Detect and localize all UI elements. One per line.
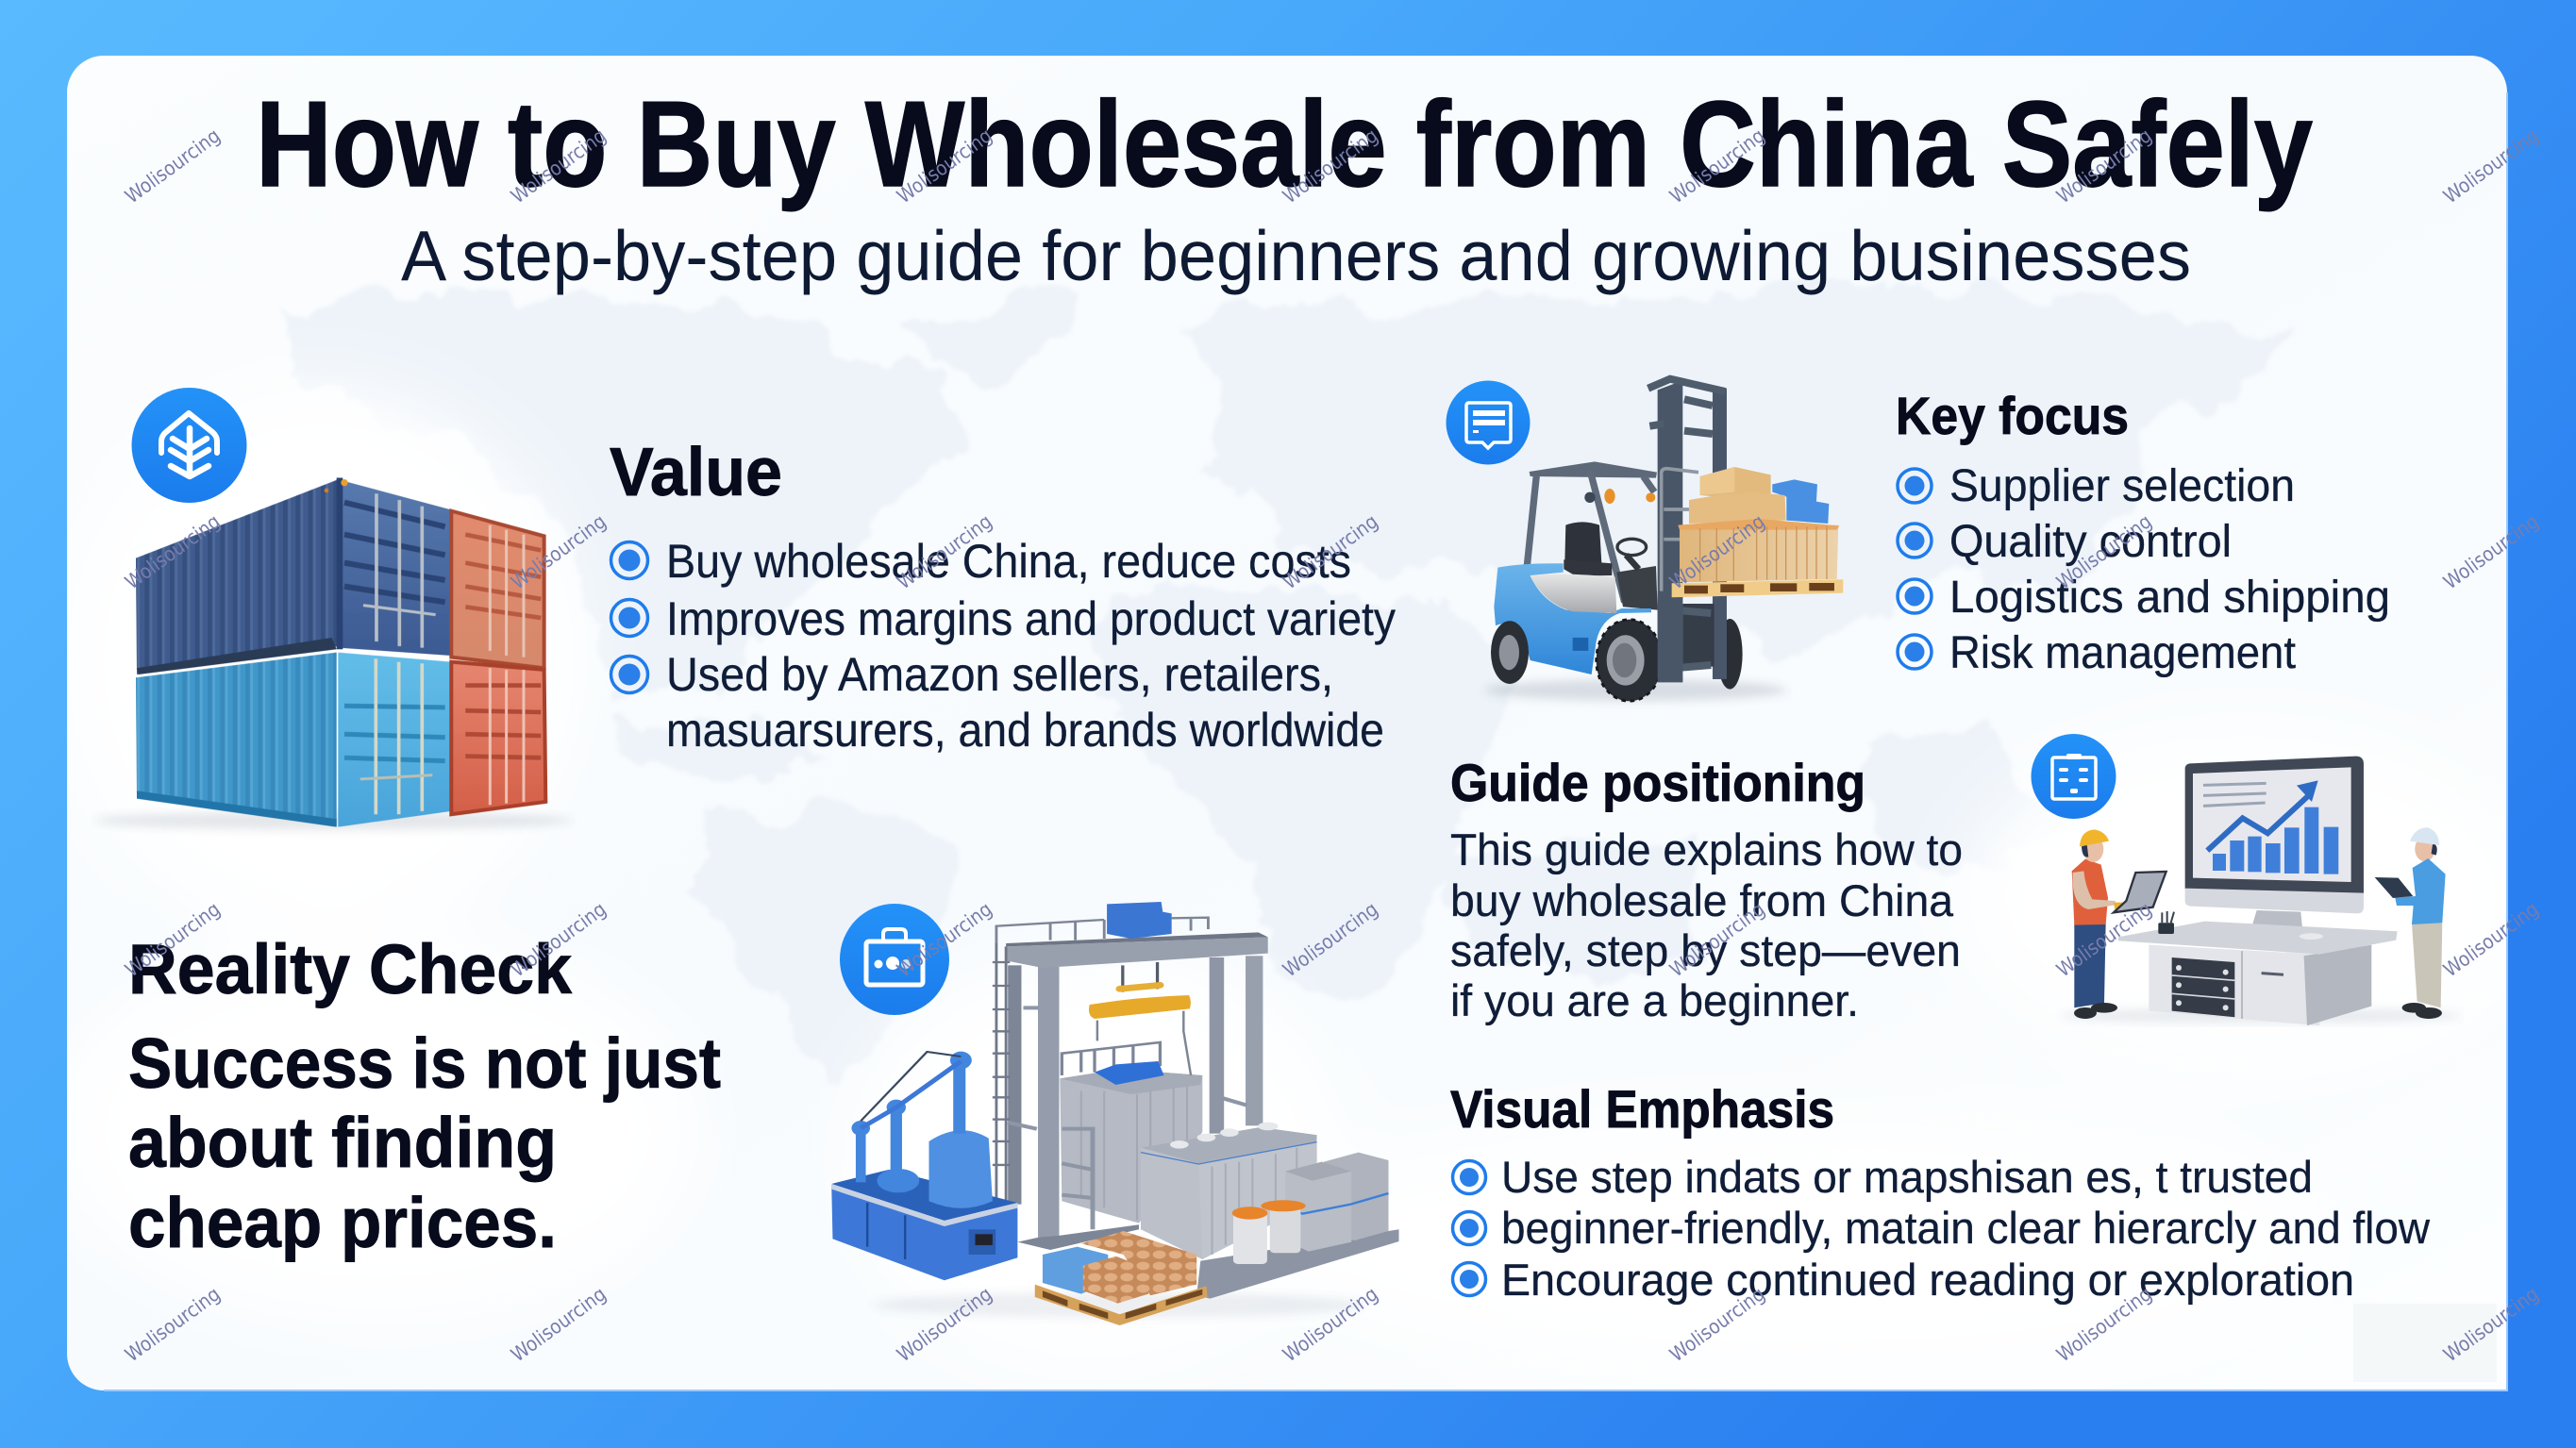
- subtitle: A step-by-step guide for beginners and growing businesses: [401, 216, 2191, 295]
- Wolisourcing watermarks: Wolisourcing: [893, 898, 996, 981]
- icon: briefcase: [840, 904, 949, 1015]
- panel: factory illustration: [831, 902, 1399, 1325]
- Wolisourcing watermarks: Wolisourcing: [1279, 510, 1382, 593]
- Wolisourcing watermarks: Wolisourcing: [121, 898, 225, 981]
- bullet list: value: masuarsurers, and brands worldwide: [666, 704, 1384, 757]
- panel: reality check: [128, 930, 721, 1262]
- statement: [128, 1024, 721, 1262]
- bullet list: value: Buy wholesale China, reduce costs: [666, 535, 1351, 588]
- Wolisourcing watermarks: Wolisourcing: [2439, 1283, 2543, 1366]
- monitor: [2185, 757, 2364, 939]
- heading: value: Value: [610, 435, 782, 510]
- paragraph: buy wholesale from China: [1450, 875, 1954, 925]
- bullet list: value: Improves margins and product variety: [666, 592, 1396, 645]
- heading: visual emphasis: Visual Emphasis: [1450, 1079, 1834, 1139]
- canopy and pillars: [1527, 461, 1657, 602]
- Wolisourcing watermarks: Wolisourcing: [2052, 1283, 2156, 1366]
- paragraph: [1450, 824, 1963, 1025]
- Wolisourcing watermarks: Wolisourcing: [2439, 125, 2543, 208]
- mast: [1648, 379, 1727, 682]
- bullet list: visual emphasis: beginner-friendly, matain clear hierarcly and flow: [1501, 1203, 2431, 1253]
- industrial plant: [831, 902, 1399, 1325]
- bullet list: visual emphasis: [1453, 1152, 2431, 1305]
- lower light blue container: [136, 653, 451, 827]
- paragraph: This guide explains how to: [1450, 824, 1963, 874]
- heading: key focus: Key focus: [1896, 386, 2129, 445]
- Wolisourcing watermarks: Wolisourcing: [121, 510, 225, 593]
- Wolisourcing watermarks: Wolisourcing: [507, 1283, 611, 1366]
- Wolisourcing watermarks: Wolisourcing: [893, 510, 996, 593]
- forklift with crate: [1484, 379, 1843, 701]
- bullet list: visual emphasis: Encourage continued reading or exploration: [1501, 1255, 2354, 1305]
- statement: about finding: [128, 1103, 557, 1182]
- card content backdrop: faint world map and halos: [287, 278, 2291, 1077]
- white halos behind illustrations: [347, 389, 2078, 873]
- stacked cubes: [1285, 1153, 1388, 1252]
- bullet list: key focus: Logistics and shipping: [1949, 573, 2390, 623]
- paragraph: if you are a beginner.: [1450, 975, 1859, 1025]
- bullet list: value: [611, 535, 1396, 757]
- front tank: [1141, 1127, 1317, 1259]
- Wolisourcing watermarks: Wolisourcing: [507, 125, 611, 208]
- statement: cheap prices.: [128, 1183, 557, 1262]
- bullet list: key focus: Risk management: [1949, 628, 2296, 678]
- Wolisourcing watermarks: Wolisourcing: [1279, 1283, 1382, 1366]
- bullet list: visual emphasis: Use step indats or mapshisan es, t trusted: [1501, 1152, 2313, 1202]
- forklift body: [1494, 563, 1651, 674]
- stacked shipping containers: [94, 478, 573, 830]
- bullet list: key focus: Supplier selection: [1949, 461, 2295, 511]
- panel: containers illustration: [94, 388, 573, 830]
- worker with laptop: [2072, 829, 2166, 1019]
- lower red container: [451, 662, 545, 814]
- heading: reality check: Reality Check: [128, 930, 573, 1008]
- Wolisourcing watermarks: Wolisourcing: [2052, 125, 2156, 208]
- Wolisourcing watermarks: Wolisourcing: [1279, 898, 1382, 981]
- Wolisourcing watermarks: Wolisourcing: [1665, 510, 1769, 593]
- top dark blue container: [136, 478, 451, 674]
- yellow lifting beam: [1089, 962, 1191, 1075]
- Wolisourcing watermarks: Wolisourcing: [2439, 898, 2543, 981]
- panel: value: [610, 435, 1396, 757]
- wheels: [1491, 620, 1663, 701]
- Wolisourcing watermarks: Wolisourcing: [1665, 125, 1769, 208]
- paragraph: safely, step by step—even: [1450, 925, 1961, 975]
- panel: visual emphasis: [1450, 1079, 2431, 1305]
- worker with tablet: [2375, 827, 2446, 1019]
- top red container: [451, 511, 544, 668]
- Wolisourcing watermarks: Wolisourcing: [2439, 510, 2543, 593]
- panel: key focus: [1896, 386, 2390, 678]
- monitor, desk and two workers: [2060, 757, 2463, 1025]
- gantry frame: [993, 918, 1268, 1250]
- bullet list: key focus: Quality control: [1949, 517, 2232, 567]
- far wheel: [1717, 619, 1743, 690]
- scan patch at bottom right corner: [2353, 1304, 2497, 1382]
- icon: message card: [1446, 381, 1531, 464]
- icon: clipboard: [2031, 734, 2116, 819]
- panel: guide positioning: [1450, 753, 1963, 1025]
- heading: guide positioning: Guide positioning: [1450, 753, 1865, 812]
- blue base unit: [831, 1170, 1017, 1280]
- Wolisourcing watermarks: Wolisourcing: [507, 510, 611, 593]
- drums: [1232, 1200, 1306, 1264]
- Wolisourcing watermarks: Wolisourcing: [507, 898, 611, 981]
- back tank: [1060, 1069, 1202, 1223]
- desk: [2118, 911, 2398, 1025]
- platform: [1196, 1229, 1399, 1299]
- panel: monitor illustration: [2031, 734, 2463, 1025]
- Wolisourcing watermarks: Wolisourcing: [1665, 898, 1769, 981]
- statement: Success is not just: [128, 1024, 721, 1103]
- icon: shield leaf: [132, 388, 247, 503]
- Wolisourcing watermarks: Wolisourcing: [1665, 1283, 1769, 1366]
- Wolisourcing watermarks: Wolisourcing: [893, 125, 996, 208]
- seat and wheel: [1564, 522, 1658, 610]
- Wolisourcing watermarks: Wolisourcing: [893, 1283, 996, 1366]
- Wolisourcing watermarks: Wolisourcing: [2052, 510, 2156, 593]
- bar chart with rising arrow: [2207, 780, 2338, 874]
- blue motor: [1107, 902, 1172, 939]
- Wolisourcing watermarks: Wolisourcing: [1279, 125, 1382, 208]
- Wolisourcing watermarks: Wolisourcing: [121, 1283, 225, 1366]
- faint world map: [268, 283, 2293, 1085]
- panel: forklift illustration: [1446, 379, 1843, 701]
- pallet and goods: [1035, 1231, 1208, 1325]
- bullet list: value: Used by Amazon sellers, retailers,: [666, 648, 1333, 701]
- title: How to Buy Wholesale from China Safely: [256, 76, 2313, 212]
- blue tank and arms: [851, 1052, 993, 1208]
- bullet list: key focus: [1898, 461, 2390, 678]
- Wolisourcing watermarks: Wolisourcing: [121, 125, 225, 208]
- carriage front: [1658, 469, 1698, 682]
- Wolisourcing watermarks: Wolisourcing: [2052, 898, 2156, 981]
- cartons: [1689, 467, 1829, 524]
- crate on pallet: [1672, 519, 1843, 597]
